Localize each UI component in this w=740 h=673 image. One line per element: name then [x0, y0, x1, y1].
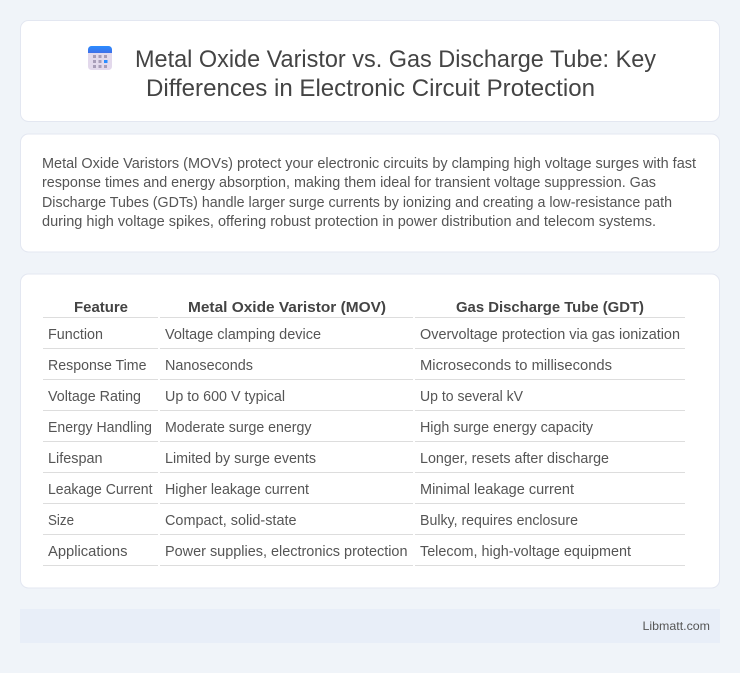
text block: introduction: Discharge Tubes (GDTs) handle larger surge currents by ionizing and creating a low-resistance path [42, 195, 672, 211]
row: voltage rating [48, 389, 523, 405]
row: applications: Telecom, high-voltage equipment [420, 544, 631, 560]
title: Metal Oxide Varistor vs. Gas Discharge Tube: Key [135, 46, 656, 73]
row: lifespan [48, 451, 609, 467]
row: lifespan: Limited by surge events [165, 451, 316, 467]
row: lifespan: Lifespan [48, 451, 102, 467]
footer bar [20, 609, 720, 643]
row: applications: Power supplies, electronics protection [165, 544, 408, 560]
row: voltage rating: Voltage Rating [48, 389, 141, 405]
table header row: Metal Oxide Varistor (MOV) [188, 300, 386, 316]
row: applications: Applications [48, 544, 128, 560]
text block: introduction: during high voltage spikes, offering robust protection in power distribution and telecom systems. [42, 214, 656, 230]
footer credit: Libmatt.com [642, 619, 710, 633]
panel: introduction [20, 134, 720, 252]
icon: calendar [88, 46, 112, 70]
row: lifespan: Longer, resets after discharge [420, 451, 609, 467]
row: voltage rating: Up to 600 V typical [165, 389, 285, 405]
row: energy handling: High surge energy capacity [420, 420, 594, 436]
row: function: Function [48, 327, 103, 343]
row: function: Overvoltage protection via gas ionization [420, 327, 680, 343]
table header row: Gas Discharge Tube (GDT) [456, 300, 644, 316]
row: function: Voltage clamping device [165, 327, 321, 343]
title: Differences in Electronic Circuit Protection [146, 75, 595, 102]
row: size [48, 513, 578, 529]
row: leakage current: Higher leakage current [165, 482, 309, 498]
text block: introduction [42, 156, 696, 230]
row: leakage current: Minimal leakage current [420, 482, 574, 498]
title [135, 46, 656, 102]
row: size: Bulky, requires enclosure [420, 513, 578, 529]
text block: introduction: response times and energy absorption, making them ideal for transient voltage suppression. Gas [42, 175, 656, 191]
row: leakage current: Leakage Current [48, 482, 152, 498]
text block: introduction: Metal Oxide Varistors (MOVs) protect your electronic circuits by clamping high voltage surges with fast [42, 156, 696, 172]
row: response time [48, 358, 612, 374]
table header row [74, 300, 644, 316]
row: energy handling: Energy Handling [48, 420, 152, 436]
row: voltage rating: Up to several kV [420, 389, 523, 405]
row: response time: Nanoseconds [165, 358, 253, 374]
row: energy handling [48, 420, 594, 436]
row: leakage current [48, 482, 574, 498]
row: size: Size [48, 513, 74, 529]
row: response time: Response Time [48, 358, 146, 374]
row: size: Compact, solid-state [165, 513, 296, 529]
table header row: Feature [74, 300, 128, 316]
panel: title header [20, 20, 720, 122]
row: applications [48, 544, 631, 560]
panel: comparison table [20, 274, 720, 588]
row: response time: Microseconds to milliseconds [420, 358, 612, 374]
row: energy handling: Moderate surge energy [165, 420, 312, 436]
row: function [48, 327, 680, 343]
